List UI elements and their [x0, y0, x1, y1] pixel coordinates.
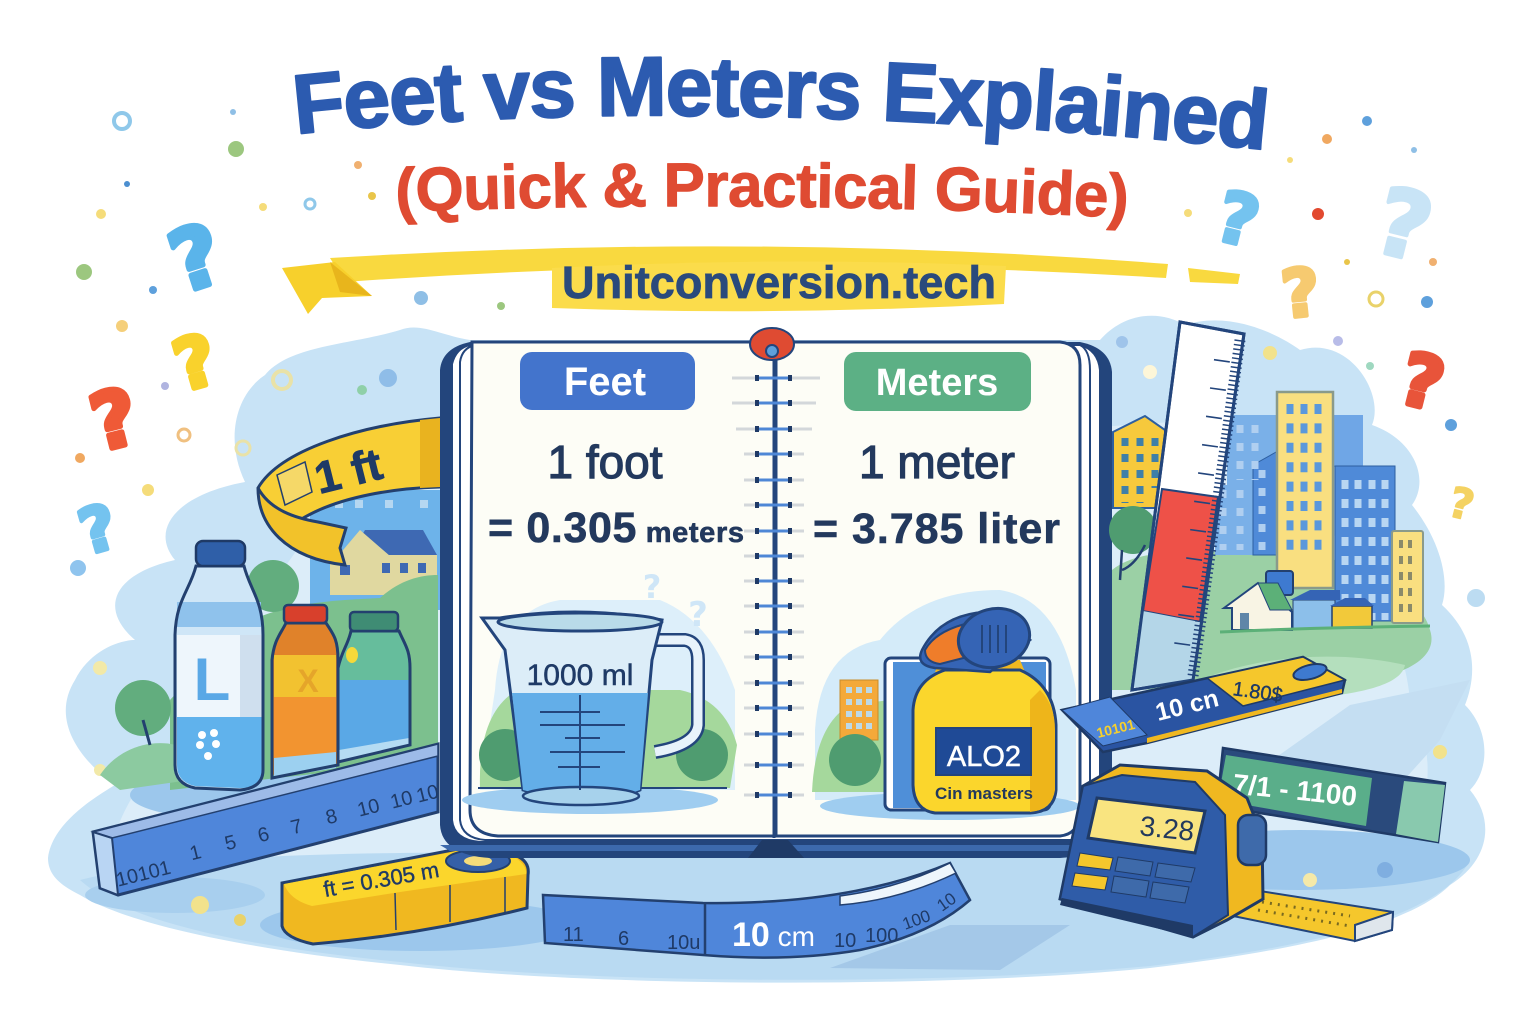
blue ruler: 6: [255, 823, 272, 847]
question marks: ?: [82, 372, 148, 470]
bottom curved tape: 100: [865, 925, 898, 947]
sky, hills, houses and trees: [100, 490, 440, 790]
yellow towers: [1109, 392, 1423, 623]
bottle: large water: L: [194, 646, 230, 713]
flat blue yellow ruler: 10 cn: [1153, 684, 1221, 727]
blue ruler: 10: [414, 781, 441, 808]
question marks: ?: [165, 318, 226, 408]
question marks: ?: [1365, 167, 1442, 284]
blue ruler: 10: [355, 795, 382, 822]
badge: Feet: [520, 352, 695, 410]
text: 1 foot: 1 foot: [547, 436, 663, 488]
blue ruler: 5: [222, 831, 239, 855]
text: conversion to meters: = 0.305 meters: [488, 504, 744, 552]
measuring cup scene: ?: [688, 595, 708, 635]
yellow tape case: ft = 0.305 m: [322, 857, 441, 902]
measuring cup scene: ?: [643, 568, 661, 606]
question marks: ?: [158, 204, 234, 313]
bottom curved tape: 100: [900, 906, 933, 934]
text: conversion to liter: = 3.785 liter: [813, 505, 1060, 553]
question marks: [71, 167, 1479, 569]
bottom curved tape: [543, 863, 970, 958]
bottle: orange: [272, 605, 338, 778]
blue ruler: [93, 744, 441, 895]
subtitle: (Quick & Practical Guide): [398, 162, 1126, 231]
yellow jug scene: [812, 590, 1080, 820]
question marks: ?: [1278, 253, 1324, 334]
badge: Meters: [844, 352, 1031, 411]
question marks: ?: [71, 489, 125, 569]
tall ruler: [1132, 322, 1244, 690]
bottle: orange: X: [297, 663, 319, 699]
green box: [1217, 748, 1445, 842]
tape measure device: 3.28: [1138, 810, 1196, 847]
bottom curved tape: 10: [834, 930, 856, 952]
blue ruler: 8: [323, 805, 340, 829]
hills: [1112, 545, 1432, 700]
bottle: green: [338, 612, 410, 763]
background blue towers: [1215, 415, 1395, 621]
flat blue yellow ruler: 10101: [1095, 716, 1137, 741]
badge: Feet: Feet: [564, 360, 646, 404]
right page text: [813, 352, 1060, 553]
notebook: [440, 328, 1112, 858]
title: Feet vs Meters Explained: [294, 56, 1268, 150]
left page text: [488, 352, 744, 552]
bottle: large water: [175, 541, 263, 790]
tape: 1 ft: [258, 418, 440, 565]
bottom curved tape: 6: [618, 928, 629, 950]
question marks: ?: [1392, 336, 1452, 428]
tape measure device: [1060, 765, 1393, 941]
left scene: hills, tape measure and bottles: [93, 418, 528, 944]
notebook cover and pages: [440, 342, 1112, 858]
scattered confetti dots: [70, 109, 1485, 926]
bottom curved tape: 10: [933, 889, 960, 915]
background: watercolor wash: [48, 316, 1485, 983]
yellow jug scene: Cin masters: [935, 784, 1033, 803]
badge: Meters: Meters: [876, 362, 998, 404]
flat blue yellow ruler: [1062, 657, 1345, 752]
bottom curved tape: 11: [563, 924, 584, 946]
green box: 7/1 - 1100: [1231, 768, 1358, 812]
text: 1 meter: 1 meter: [859, 436, 1015, 488]
tape: 1 ft: 1 ft: [309, 438, 387, 504]
spiral binding: [732, 360, 820, 838]
measuring cup scene: 1000 ml: [527, 659, 633, 692]
yellow tape case: [282, 848, 528, 944]
bottom curved tape: 10u: [667, 932, 700, 954]
measuring cup scene: [462, 568, 737, 814]
flat blue yellow ruler: 1.80$: [1231, 678, 1284, 707]
bottom curved tape: 10 cm: [732, 916, 815, 954]
blue ruler: 10: [388, 787, 415, 814]
small houses: [1220, 571, 1430, 632]
banner ribbon: [282, 246, 1240, 314]
banner ribbon: Unitconversion.tech: [562, 257, 996, 308]
question marks: ?: [1208, 175, 1267, 264]
question marks: ?: [1444, 477, 1479, 531]
yellow jug scene: ALO2: [947, 741, 1021, 773]
red pin: [750, 328, 794, 360]
blue ruler: 7: [288, 815, 305, 839]
right scene: city: [1060, 322, 1445, 941]
blue ruler: 10101: [114, 857, 173, 892]
blue ruler: 1: [187, 841, 204, 865]
